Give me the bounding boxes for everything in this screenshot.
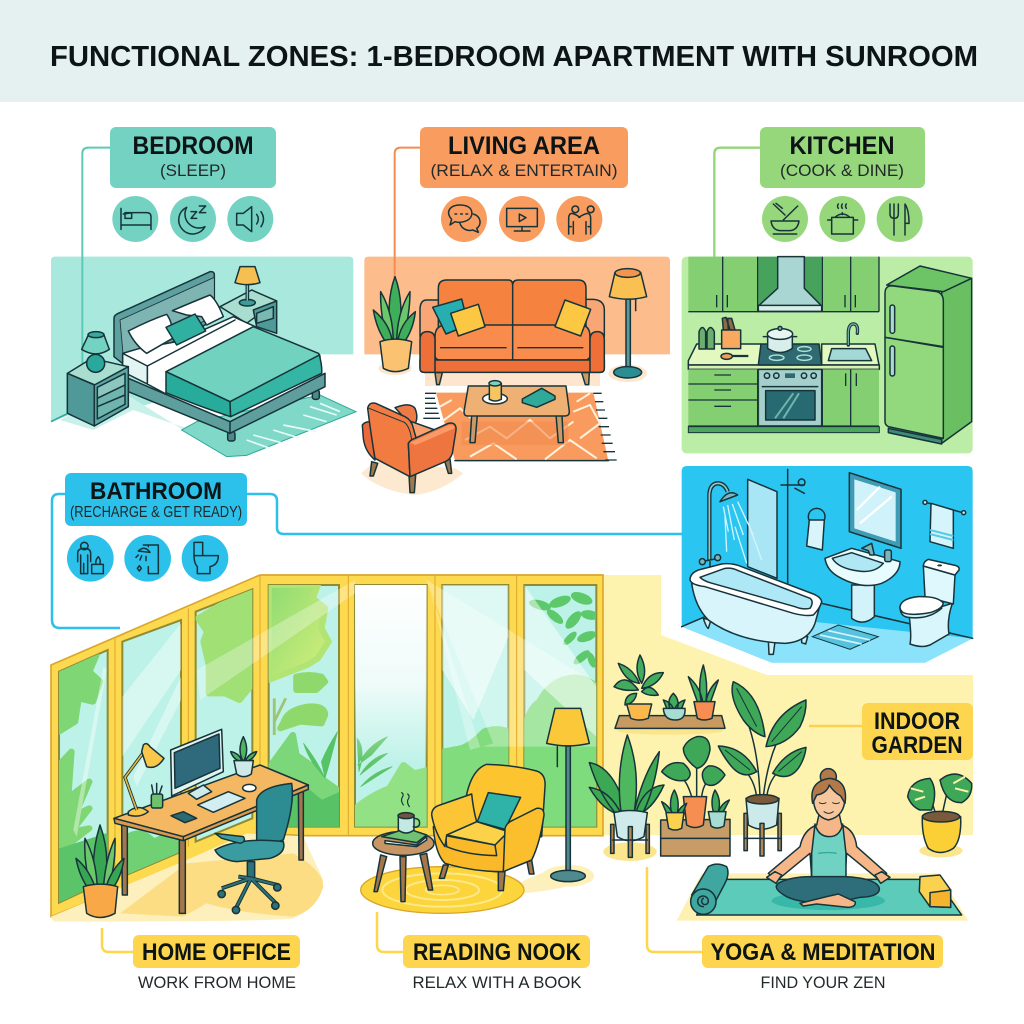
bed headboard xyxy=(114,272,214,367)
vine leaves pane 7 xyxy=(529,592,596,668)
corner monstera xyxy=(908,774,972,857)
shelf plants xyxy=(614,655,718,720)
monitor xyxy=(188,785,212,799)
bedroom wall xyxy=(51,257,353,422)
shower head and water xyxy=(709,483,762,563)
pillows xyxy=(128,295,223,353)
heading: bathroom: BATHROOM xyxy=(90,478,222,505)
right nightstand xyxy=(220,290,277,333)
heading: living area xyxy=(420,127,628,188)
heading: bathroom xyxy=(65,473,247,526)
keyboard xyxy=(198,792,245,812)
shower glass xyxy=(748,469,805,583)
pencil cup xyxy=(151,794,163,808)
pillows xyxy=(433,299,468,334)
header band xyxy=(0,0,1024,102)
window panes xyxy=(59,585,600,905)
toilet xyxy=(900,559,959,646)
rug xyxy=(423,393,617,461)
duvet xyxy=(166,327,322,417)
heading: bedroom xyxy=(110,127,276,188)
sink and faucet xyxy=(828,324,872,361)
pane 1 xyxy=(59,655,100,852)
heading: kitchen xyxy=(760,127,925,188)
pot xyxy=(763,326,797,352)
icons: kitchen xyxy=(762,196,923,242)
person meditating xyxy=(767,769,890,910)
label: indoor garden: INDOOR xyxy=(874,708,960,735)
label: indoor garden: GARDEN xyxy=(872,732,962,759)
yoga block xyxy=(919,875,951,907)
label: home office: HOME OFFICE xyxy=(142,939,291,966)
connector: home office xyxy=(102,928,133,952)
bathtub xyxy=(690,555,822,654)
bedroom floor line xyxy=(51,414,67,422)
caption: yoga and meditation: FIND YOUR ZEN xyxy=(760,973,886,992)
rug xyxy=(182,395,356,457)
heading: kitchen: (COOK & DINE) xyxy=(780,161,904,180)
upper cabinets xyxy=(688,257,879,312)
panel: kitchen xyxy=(682,148,973,453)
cooktop and oven xyxy=(758,344,822,426)
bathroom floor xyxy=(682,612,973,663)
connector: reading nook xyxy=(377,912,403,952)
reading floor lamp xyxy=(542,708,594,887)
icons: living area xyxy=(441,196,602,242)
home office desk xyxy=(114,729,308,913)
panel: bedroom xyxy=(51,148,356,457)
connector: indoor garden xyxy=(809,725,862,727)
floor shadow right of reading nook xyxy=(507,865,591,893)
label: yoga and meditation: YOGA & MEDITATION xyxy=(710,939,936,966)
heading: bedroom: BEDROOM xyxy=(132,132,254,160)
pane 3 canopy xyxy=(198,590,252,700)
panel: living area xyxy=(361,148,670,495)
desk plant xyxy=(231,737,257,762)
armchair xyxy=(361,403,463,495)
pane 4 canopy xyxy=(269,585,329,680)
sofa shadow xyxy=(425,373,600,386)
monstera xyxy=(680,767,710,797)
panel: sunroom windows xyxy=(51,575,603,917)
towel ring xyxy=(807,508,825,550)
range hood xyxy=(758,257,822,311)
mirror xyxy=(849,473,901,548)
panel: sunroom back wall xyxy=(603,575,973,835)
sun glow xyxy=(355,585,427,765)
heading: bedroom: (SLEEP) xyxy=(160,161,226,180)
foliage xyxy=(59,585,595,905)
bathroom wall xyxy=(682,466,973,663)
living wall xyxy=(364,257,670,354)
title: FUNCTIONAL ZONES: 1-BEDROOM APARTMENT WITH SUNROOM xyxy=(50,41,978,73)
lower cabinets xyxy=(688,369,879,433)
floor: sunroom xyxy=(51,729,591,922)
floor plant xyxy=(76,825,124,917)
pane 5 xyxy=(355,765,427,827)
plant: snake plant xyxy=(373,277,415,375)
utensils and bottles xyxy=(699,317,748,359)
heading: living area: (RELAX & ENTERTAIN) xyxy=(430,161,618,180)
refrigerator xyxy=(885,266,972,444)
sink xyxy=(825,543,900,622)
left table lamp xyxy=(82,332,109,372)
bedroom floor wash xyxy=(60,397,230,443)
pane 6 xyxy=(442,726,508,804)
icons: bedroom xyxy=(112,196,273,242)
bed frame xyxy=(128,373,325,441)
wall shelf xyxy=(615,716,725,735)
connector: yoga xyxy=(647,867,702,952)
floor lamp xyxy=(608,269,647,382)
panel: indoor garden and yoga xyxy=(542,655,972,921)
coffee table xyxy=(462,381,569,445)
desk lamp xyxy=(128,807,148,816)
pane 2 lower bush xyxy=(128,830,179,874)
yoga mat xyxy=(677,864,968,921)
label: reading nook: READING NOOK xyxy=(413,939,582,966)
banana plant xyxy=(718,682,806,856)
pane 7 xyxy=(524,677,595,827)
caption: home office: WORK FROM HOME xyxy=(138,973,296,992)
icons: bathroom xyxy=(67,535,228,582)
heading: bathroom: (RECHARGE & GET READY) xyxy=(70,504,242,521)
bath mat xyxy=(812,625,878,649)
office chair xyxy=(215,783,292,914)
left nightstand xyxy=(67,358,128,426)
kitchen wall xyxy=(682,257,973,453)
countertop xyxy=(688,344,879,369)
label: indoor garden xyxy=(862,703,973,760)
heading: living area: LIVING AREA xyxy=(448,132,600,160)
mattress and sheet xyxy=(123,317,257,394)
yellow armchair xyxy=(432,764,545,891)
side table xyxy=(373,793,434,902)
spider plant xyxy=(589,735,664,861)
sofa xyxy=(420,280,604,385)
sun rays xyxy=(197,580,596,750)
reading rug xyxy=(361,867,524,913)
panel: bathroom xyxy=(682,466,973,663)
right table lamp xyxy=(235,267,260,306)
connector: bathroom xyxy=(52,494,682,628)
mat roll xyxy=(692,864,728,912)
caption: reading nook: RELAX WITH A BOOK xyxy=(412,973,582,992)
wood plant stand xyxy=(661,736,730,856)
towel bar xyxy=(923,500,966,548)
heading: kitchen: KITCHEN xyxy=(790,132,894,160)
window frame xyxy=(51,575,603,917)
